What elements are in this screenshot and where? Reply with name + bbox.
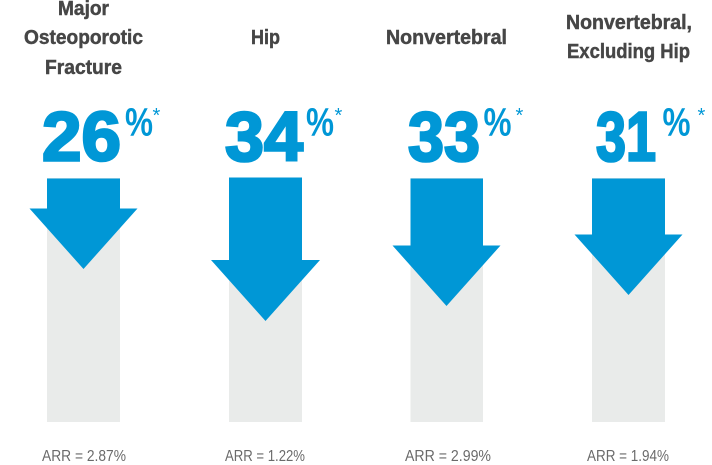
heading: major osteoporotic fracture: Fracture — [45, 57, 122, 79]
ARR label: ARR = 2.87% — [42, 448, 126, 465]
heading: nonvertebral excluding hip: Nonvertebral, — [566, 12, 692, 34]
panel: major osteoporotic fracture — [24, 0, 160, 465]
value: 33 percent — [408, 98, 524, 176]
value: 31 percent: % — [662, 100, 690, 144]
ARR label: ARR = 1.94% — [587, 448, 669, 465]
value: 26 percent — [42, 98, 160, 176]
heading: nonvertebral excluding hip: Excluding Hip — [567, 41, 690, 63]
heading: nonvertebral: Nonvertebral — [386, 27, 507, 49]
heading: nonvertebral excluding hip — [566, 12, 692, 63]
arrow: down 26 percent — [30, 178, 138, 269]
value: 26 percent: * — [152, 105, 160, 127]
arrow: down 31 percent — [574, 178, 682, 295]
bar track — [592, 178, 665, 422]
heading: major osteoporotic fracture: Osteoporotic — [24, 27, 143, 49]
value: 33 percent: % — [484, 100, 512, 144]
value: 31 percent: 31 — [596, 98, 656, 176]
ARR label: ARR = 1.22% — [225, 448, 305, 465]
bar track — [47, 178, 120, 422]
value: 31 percent: * — [698, 105, 706, 127]
heading: hip: Hip — [251, 27, 280, 49]
arrow: down 33 percent — [392, 178, 500, 306]
value: 34 percent: % — [306, 100, 334, 144]
panel: hip — [211, 27, 342, 465]
value: 34 percent: * — [334, 105, 342, 127]
value: 33 percent: 33 — [408, 98, 480, 176]
panel: nonvertebral excluding hip — [566, 12, 706, 465]
heading: major osteoporotic fracture — [24, 0, 143, 79]
value: 26 percent: 26 — [42, 98, 121, 176]
arrow: down 34 percent — [211, 178, 320, 321]
bar track — [229, 178, 302, 422]
panel: nonvertebral — [386, 27, 524, 465]
value: 34 percent: 34 — [225, 98, 303, 176]
value: 26 percent: % — [125, 100, 153, 144]
value: 33 percent: * — [516, 105, 524, 127]
ARR label: ARR = 2.99% — [405, 448, 491, 465]
value: 34 percent — [225, 98, 342, 176]
bar track — [410, 178, 483, 422]
